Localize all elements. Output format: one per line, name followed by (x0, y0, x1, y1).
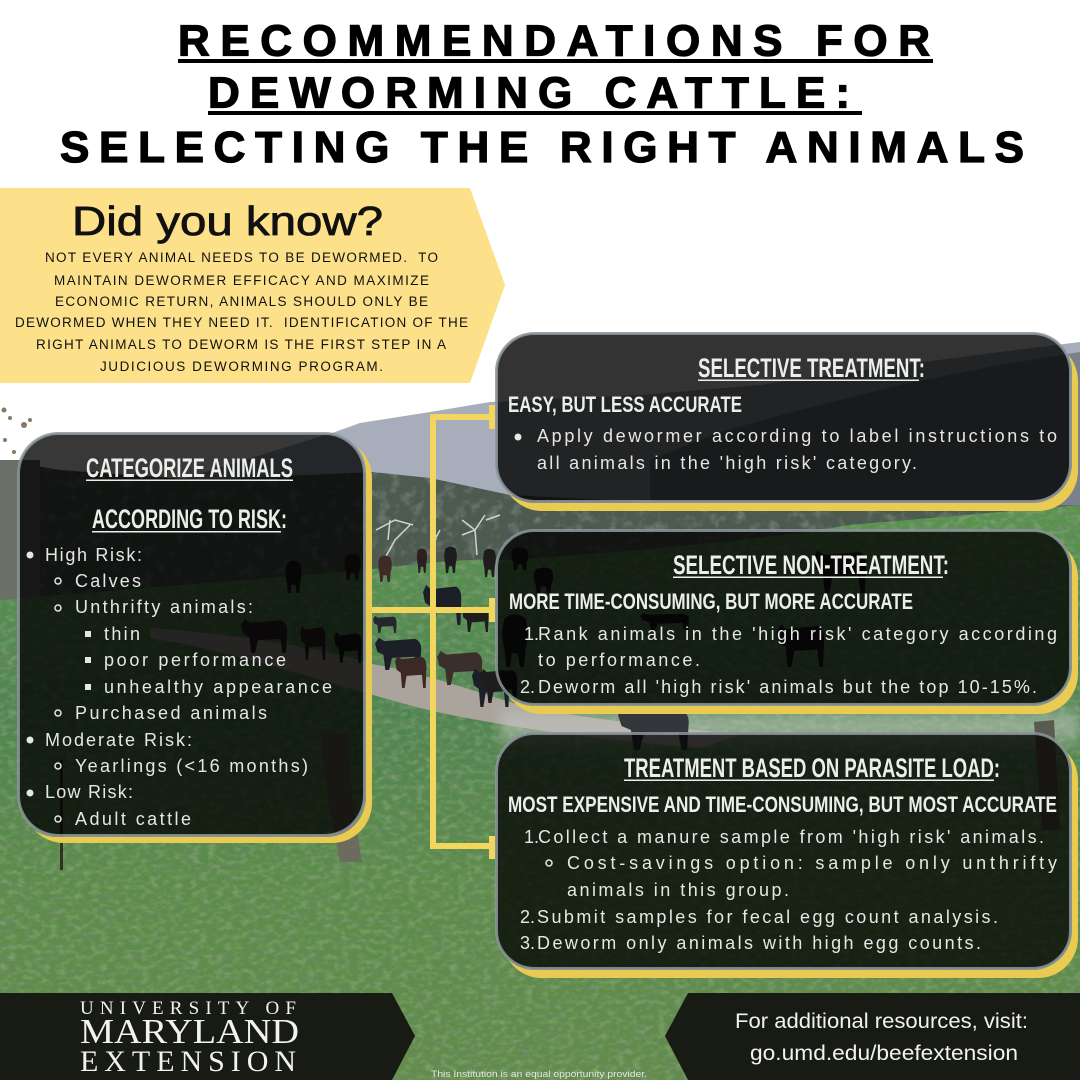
text block: selective treatment list (514, 426, 1057, 473)
text block: parasite load steps: Cost-savings option: sample only unthrifty (567, 853, 1057, 873)
text block: parasite load steps: animals in this group. (567, 880, 789, 900)
risk list: Low Risk: (45, 782, 133, 802)
text block: parasite load steps: 2. (520, 907, 535, 927)
title: SELECTING THE RIGHT ANIMALS (60, 123, 1024, 172)
panel: selective non-treatment (496, 530, 1078, 714)
heading: categorize animals: CATEGORIZE ANIMALS (86, 453, 293, 483)
text block: did you know body (15, 250, 468, 374)
heading: selective treatment: SELECTIVE TREATMENT: (698, 353, 925, 383)
risk list: Calves (75, 571, 141, 591)
risk list: Adult cattle (75, 809, 191, 829)
text block: selective non-treatment steps: to performance. (538, 650, 700, 670)
footer panel: additional resources (665, 993, 1080, 1080)
subheading: easy but less accurate: EASY, BUT LESS ACCURATE (508, 392, 742, 417)
text block: did you know body: DEWORMED WHEN THEY NEED IT. IDENTIFICATION OF THE (15, 315, 468, 330)
text block: parasite load steps: 1. (524, 827, 539, 847)
subheading: more time-consuming: MORE TIME-CONSUMING, BUT MORE ACCURATE (509, 589, 913, 614)
title: RECOMMENDATIONS FOR (178, 16, 930, 66)
footer panel: university of maryland extension logo (0, 993, 415, 1080)
panel: selective treatment (496, 334, 1078, 511)
footer panel: university of maryland extension logo: UNIVERSITY OF (80, 998, 296, 1019)
footer panel: additional resources: go.umd.edu/beefextension (750, 1042, 1018, 1065)
risk list: poor performance (104, 650, 286, 670)
text block: parasite load steps: Submit samples for fecal egg count analysis. (537, 907, 998, 927)
text block: did you know body: RIGHT ANIMALS TO DEWORM IS THE FIRST STEP IN A (36, 337, 446, 352)
text block: parasite load steps: Deworm only animals with high egg counts. (537, 933, 981, 953)
risk list: Purchased animals (75, 703, 267, 723)
panel: categorize animals (18, 434, 372, 843)
risk list: Moderate Risk: (45, 730, 192, 750)
text block: selective non-treatment steps (520, 624, 1057, 697)
text block: parasite load steps (520, 827, 1057, 953)
footer panel: additional resources: For additional resources, visit: (735, 1010, 1028, 1033)
text block: selective non-treatment steps: Deworm all 'high risk' animals but the top 10-15%. (538, 677, 1037, 697)
connector arrows (372, 405, 495, 859)
text block: did you know body: JUDICIOUS DEWORMING PROGRAM. (100, 359, 383, 374)
heading: did you know: Did you know? (72, 198, 383, 244)
footer panel: university of maryland extension logo: EXTENSION (80, 1045, 296, 1078)
risk list: Yearlings (<16 months) (75, 756, 308, 776)
risk list: unhealthy appearance (104, 677, 332, 697)
text block: parasite load steps: Collect a manure sample from 'high risk' animals. (538, 827, 1044, 847)
text block: did you know body: MAINTAIN DEWORMER EFFICACY AND MAXIMIZE (54, 273, 429, 288)
text block: selective treatment list: all animals in the 'high risk' category. (537, 453, 917, 473)
text block: selective non-treatment steps: 1. (524, 624, 539, 644)
text block: did you know body: ECONOMIC RETURN, ANIMALS SHOULD ONLY BE (55, 294, 428, 309)
text block: selective treatment list: Apply dewormer according to label instructions to (537, 426, 1057, 446)
risk list: Unthrifty animals: (75, 597, 253, 617)
text block: selective non-treatment steps: 2. (520, 677, 535, 697)
text block: did you know body: NOT EVERY ANIMAL NEEDS TO BE DEWORMED. TO (45, 250, 438, 265)
heading: according to risk: ACCORDING TO RISK: (92, 504, 287, 534)
footer panel: university of maryland extension logo: MARYLAND (80, 1012, 299, 1051)
header band (0, 0, 1080, 188)
panel: treatment based on parasite load (496, 734, 1078, 978)
title: DEWORMING CATTLE: (208, 68, 850, 118)
text block: selective non-treatment steps: Rank animals in the 'high risk' category according (538, 624, 1057, 644)
risk list (26, 545, 332, 829)
risk list: thin (104, 624, 140, 644)
title (60, 16, 1024, 172)
equal opportunity note: This Institution is an equal opportunity provider. (431, 1069, 647, 1080)
text block: parasite load steps: 3. (520, 933, 535, 953)
background photo: pasture with cattle (0, 342, 1080, 1080)
panel: did you know banner (0, 188, 505, 383)
heading: selective non-treatment: SELECTIVE NON-TREATMENT: (673, 550, 949, 580)
risk list: High Risk: (45, 545, 142, 565)
